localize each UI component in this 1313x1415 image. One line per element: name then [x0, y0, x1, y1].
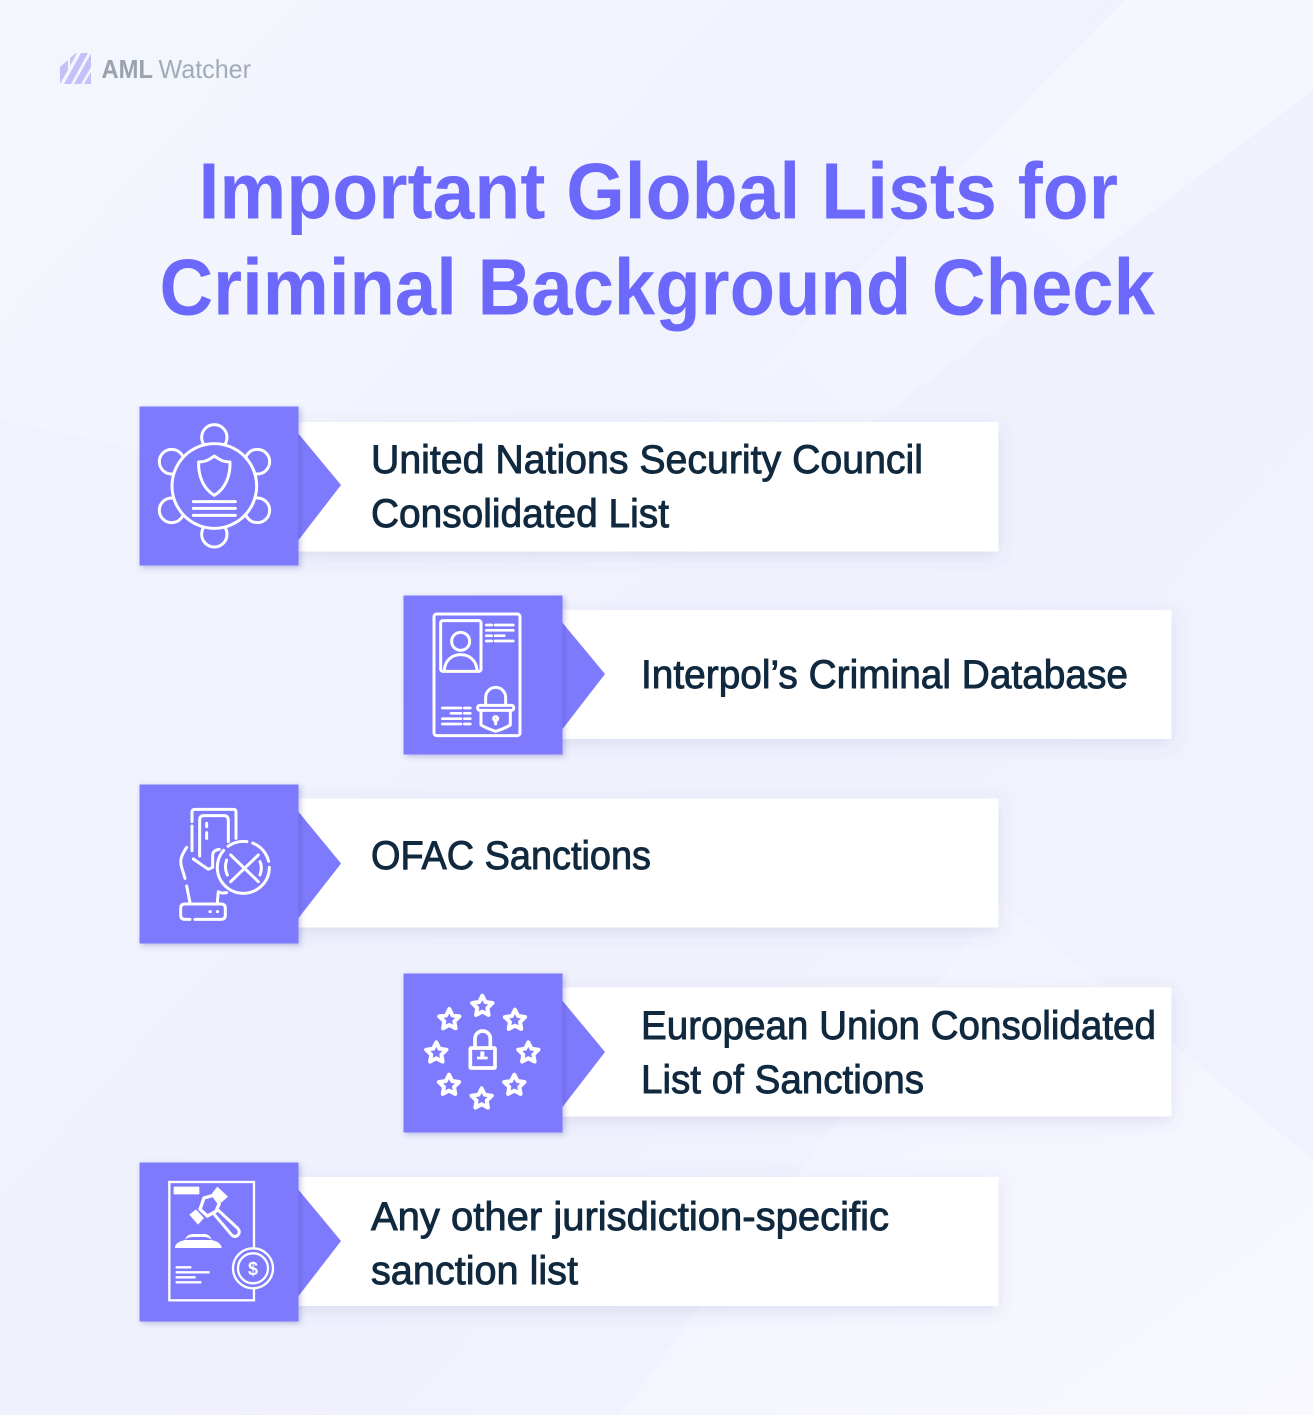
- icon tile: [404, 974, 562, 1132]
- label: [371, 438, 923, 536]
- icon: dollar sign: $: [248, 1259, 258, 1279]
- title: [160, 146, 1155, 332]
- logo: [60, 53, 251, 84]
- icon: hand holding card with cross: [181, 809, 269, 919]
- panel: European Union Consolidated List of Sanctions: [404, 974, 1172, 1132]
- panel: Any other jurisdiction-specific sanction list: [140, 1162, 998, 1322]
- logo wordmark: AML: [102, 54, 153, 84]
- title: Important Global Lists for: [198, 146, 1118, 236]
- arrow: [297, 810, 341, 920]
- label: [641, 1004, 1156, 1102]
- icon: ID document with lock: [434, 614, 520, 736]
- arrow: [297, 432, 341, 542]
- arrow: [297, 1188, 341, 1298]
- label: European Union Consolidated: [641, 1004, 1156, 1048]
- icon tile: [140, 784, 298, 944]
- label: United Nations Security Council: [371, 438, 923, 482]
- label: Consolidated List: [371, 492, 669, 536]
- panel: United Nations Security Council Consolidated List: [140, 406, 998, 566]
- logo mark: [60, 53, 91, 84]
- arrow: [561, 999, 605, 1109]
- label: [371, 1195, 889, 1293]
- arrow: [561, 621, 605, 731]
- logo wordmark: Watcher: [158, 54, 251, 84]
- icon tile: [404, 596, 562, 754]
- panel: OFAC Sanctions: [140, 784, 998, 944]
- icon: gavel document with coin: [169, 1182, 273, 1300]
- icon tile: [140, 406, 298, 566]
- panel: Interpol's Criminal Database: [404, 596, 1172, 754]
- icon: round table shield: [159, 425, 270, 547]
- logo wordmark: [102, 54, 251, 84]
- icon: stars around lock: [426, 996, 538, 1108]
- label: sanction list: [371, 1249, 578, 1293]
- label: OFAC Sanctions: [371, 834, 651, 878]
- label: Interpol’s Criminal Database: [641, 653, 1128, 697]
- title: Criminal Background Check: [160, 242, 1155, 332]
- label: List of Sanctions: [641, 1058, 924, 1102]
- label: Any other jurisdiction-specific: [371, 1195, 889, 1239]
- icon tile: [140, 1162, 298, 1322]
